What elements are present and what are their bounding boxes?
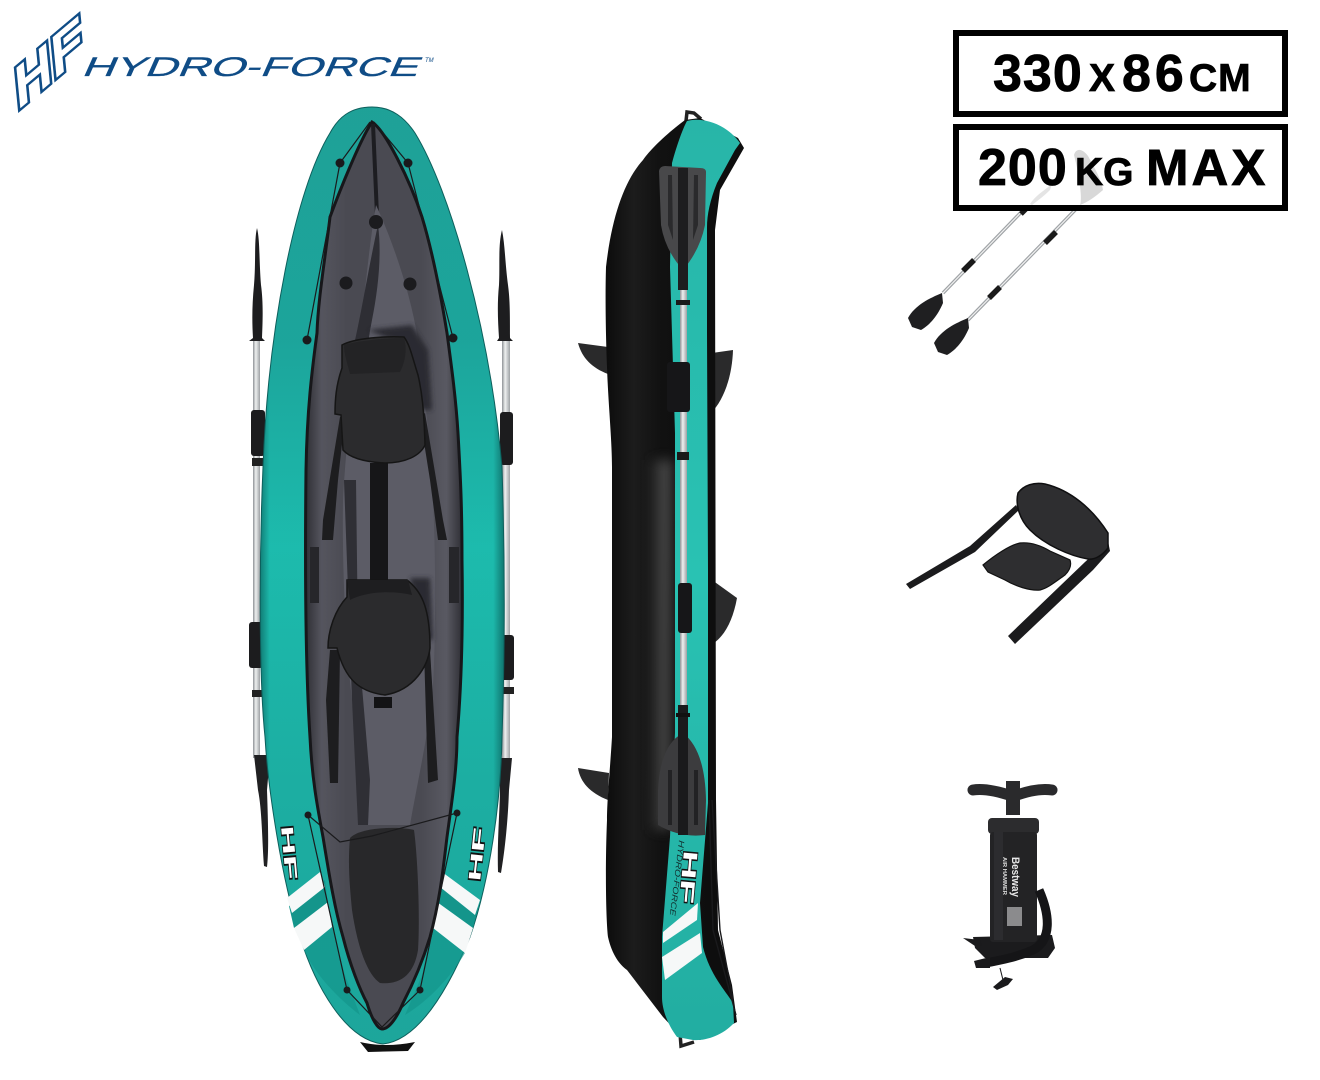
weight text: KG [1075, 151, 1134, 194]
seat shadows [368, 325, 433, 640]
side body highlight [648, 460, 672, 830]
fins [578, 343, 737, 800]
accessory: oars [908, 203, 1080, 355]
logo: wordmark: HYDRO-FORCE [78, 51, 428, 82]
centre strap [370, 463, 388, 580]
side teal tube [662, 120, 740, 1040]
kayak: top view [249, 107, 514, 1052]
pump handle [973, 781, 1052, 815]
hull HF mark: left: HF [277, 825, 301, 881]
oar blades seen through box [1030, 150, 1103, 205]
bungee cords [302, 122, 460, 1027]
oar 2 [934, 205, 1080, 355]
seat strap left [906, 505, 1019, 589]
cockpit [305, 122, 462, 1029]
spec box: max weight [956, 127, 1285, 208]
pump hose [986, 890, 1047, 963]
top paddle: left [249, 228, 270, 867]
pump base [973, 935, 1055, 958]
pump label: Air Hammer: AIR HAMMER [1001, 857, 1007, 895]
seat strap right [1008, 541, 1110, 644]
spec box: dimensions: CM [1189, 57, 1252, 100]
weight text: MAX [1146, 139, 1268, 196]
pump nozzles [963, 938, 1013, 990]
spec box: dimensions: 86 [1122, 45, 1188, 103]
bottom skid [360, 1042, 415, 1052]
logo: trademark: TM [425, 58, 434, 64]
seat cushion [983, 543, 1071, 590]
side brand text: HYDRO-FORCE [668, 840, 686, 917]
spec box: dimensions [956, 33, 1285, 114]
spec box: dimensions: X [1089, 57, 1116, 100]
accessory: air pump [963, 781, 1055, 990]
front seat [322, 337, 447, 540]
weight text: 200 [978, 139, 1068, 197]
pump nozzle cord [1000, 968, 1003, 980]
hull HF mark: right: HF [465, 826, 489, 882]
hull stripes: left [287, 872, 332, 950]
accessory: kayak seat [906, 483, 1110, 644]
spec box: dimensions: 330 [993, 45, 1083, 103]
side carry handles [680, 112, 701, 1046]
side handles [310, 547, 459, 603]
rear seat [326, 580, 438, 783]
side bungee cords [709, 800, 736, 1015]
oar 1 [908, 203, 1030, 330]
mesh bag [349, 828, 419, 983]
top paddle: right [497, 230, 514, 873]
side body [606, 118, 744, 1040]
side HF mark: HF [675, 850, 702, 905]
hull stripes: right [433, 872, 480, 953]
pump small label [1007, 907, 1022, 926]
side stripes [662, 903, 702, 980]
side paddle [658, 166, 706, 836]
floor fittings [340, 215, 416, 290]
seat backrest [1017, 483, 1108, 559]
hull shading near stern [289, 880, 478, 1015]
kayak hull [260, 107, 504, 1044]
logo: Hydro-Force [12, 3, 434, 124]
kayak: side view [578, 112, 744, 1046]
logo: HF emblem: HF [12, 3, 85, 124]
pump label: Bestway: Bestway [1009, 857, 1021, 898]
pump cylinder [988, 818, 1039, 942]
